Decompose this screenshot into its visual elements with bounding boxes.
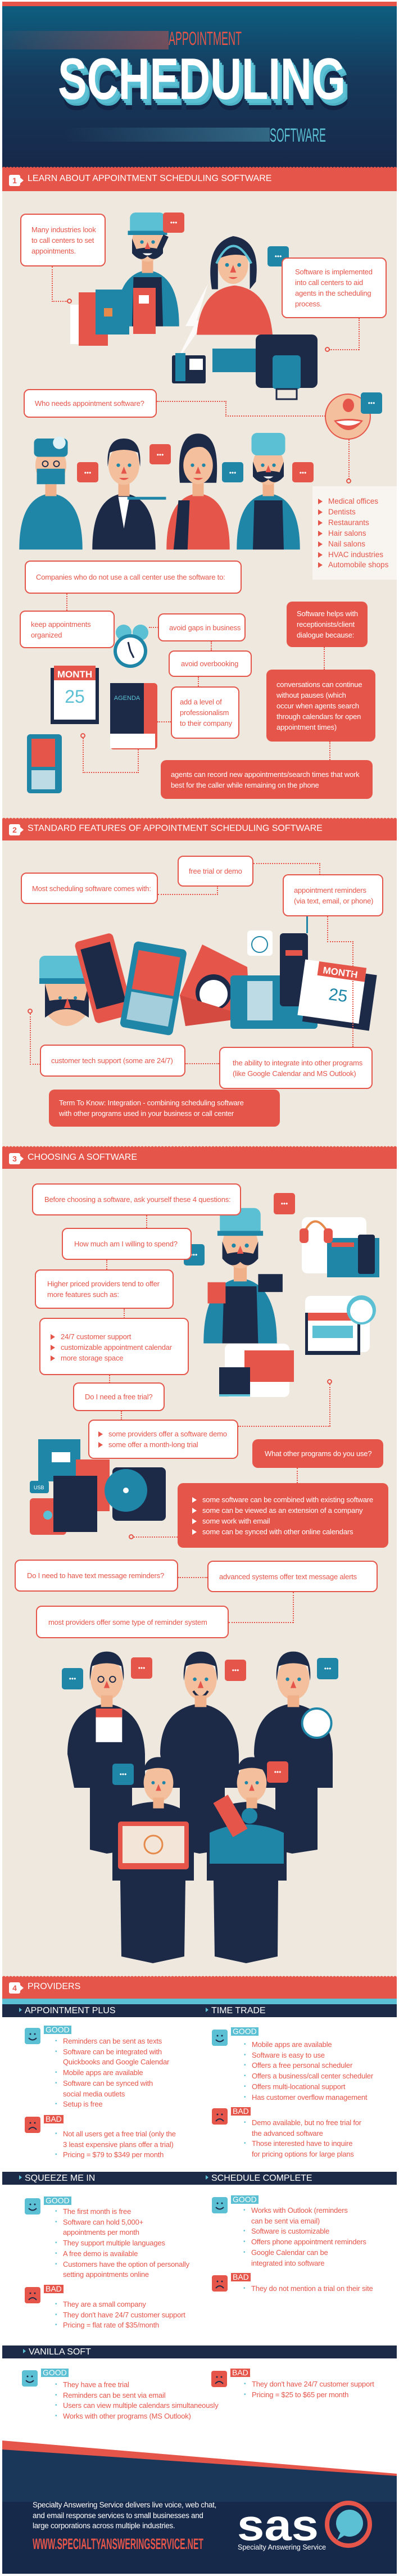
provider: vanilla soft: Users can view multiple calendars simultaneously xyxy=(63,2401,219,2410)
red box: programs list: some work with email xyxy=(202,1517,270,1525)
providers white background xyxy=(2,2017,397,2444)
box: trial list: some offer a month-long trial xyxy=(108,1440,198,1449)
man with phone xyxy=(116,213,179,326)
provider: time trade: BAD xyxy=(233,2107,249,2116)
box: most scheduling xyxy=(21,873,158,904)
box: higher priced xyxy=(35,1269,174,1309)
provider: time trade: Mobile apps are available xyxy=(252,2040,332,2049)
box: feature list: customizable appointment calendar xyxy=(61,1343,172,1352)
provider: squeeze me in: They don't have 24/7 customer support xyxy=(63,2311,185,2319)
provider: schedule complete: BAD xyxy=(233,2272,249,2281)
bubbles three men: ••• xyxy=(69,1675,76,1683)
provider bar: appointment plus / time trade xyxy=(2,2004,397,2017)
section 1 header xyxy=(2,166,397,191)
box: before choosing: Before choosing a software, ask yourself these 4 questions: xyxy=(44,1195,230,1204)
provider: time trade xyxy=(212,2027,373,2158)
provider: appointment plus: BAD xyxy=(46,2114,62,2123)
agenda book xyxy=(110,683,157,749)
provider bar: vanilla soft: VANILLA SOFT xyxy=(29,2347,91,2357)
red box: agents can record: best for the caller while remaining on the phone xyxy=(171,780,319,789)
list: industries: Restaurants xyxy=(328,518,369,527)
four professionals: ••• xyxy=(300,469,306,477)
box: free trial question: Do I need a free trial? xyxy=(85,1393,152,1401)
provider bar: squeeze me in / schedule complete xyxy=(2,2172,397,2185)
header background xyxy=(2,2,397,169)
provider: schedule complete: Works with Outlook (reminders xyxy=(251,2206,348,2215)
box: keep organized: keep appointments xyxy=(31,620,90,629)
box: avoid overbooking xyxy=(169,650,252,677)
section 3 header: 3 xyxy=(12,1154,17,1163)
provider: appointment plus: Mobile apps are available xyxy=(63,2068,143,2077)
desk phone xyxy=(172,353,206,383)
worried man with money xyxy=(203,1208,283,1344)
box: integrate xyxy=(219,1047,373,1089)
icon: calendar and clock xyxy=(305,1295,376,1355)
box: many industries xyxy=(20,214,106,266)
box: free trial: free trial or demo xyxy=(189,867,242,875)
red box: agents can record: agents can record new appointments/search times that work xyxy=(171,770,359,778)
provider bar: appointment plus / time trade: TIME TRADE xyxy=(211,2006,266,2015)
red box: helps dialogue: dialogue because: xyxy=(297,631,354,639)
provider: schedule complete: Software is customizable xyxy=(251,2227,329,2235)
section 2 header: 2 xyxy=(12,825,17,834)
provider: squeeze me in xyxy=(25,2196,190,2329)
provider: appointment plus xyxy=(25,2025,176,2159)
box: many industries: to call centers to set xyxy=(31,236,94,244)
provider: appointment plus: Reminders can be sent as texts xyxy=(63,2037,162,2045)
section 3 header xyxy=(2,1146,397,1169)
bubbles: ••• xyxy=(281,1200,288,1208)
red box: conversations xyxy=(266,670,375,742)
provider: vanilla soft: They have a free trial xyxy=(63,2380,129,2389)
four professionals: ••• xyxy=(157,451,164,459)
footer text: Specialty Answering Service delivers live voice, web chat, and email response services to small businesses and large corporations across multiple industries. xyxy=(33,2501,216,2530)
red box: programs list: some can be synced with other online calendars xyxy=(202,1527,353,1536)
provider: schedule complete xyxy=(212,2195,373,2293)
provider: appointment plus: 3 least expensive plans offer a trial) xyxy=(63,2140,174,2149)
mobile phone xyxy=(27,734,62,793)
provider: vanilla soft xyxy=(22,2368,374,2420)
bubble teal: ••• xyxy=(275,252,282,260)
bubbles three men: ••• xyxy=(324,1665,331,1673)
box: before choosing xyxy=(32,1183,241,1215)
face circle: ••• xyxy=(368,399,375,407)
red box: term to know: Term To Know: Integration - combining scheduling software xyxy=(59,1099,244,1107)
logo: SAS: Specialty Answering Service xyxy=(238,2543,326,2551)
provider: schedule complete: integrated into software xyxy=(251,2259,324,2267)
red box: conversations: without pauses (which xyxy=(276,690,346,699)
box: trial list xyxy=(88,1420,238,1459)
red box: conversations: appointment times) xyxy=(276,723,337,731)
provider: time trade: Software is easy to use xyxy=(252,2051,325,2059)
box: software implemented: process. xyxy=(295,300,322,308)
box: reminders: appointment reminders xyxy=(294,886,366,894)
software items xyxy=(30,1439,166,1535)
box: text reminders question xyxy=(15,1560,178,1592)
footer background xyxy=(2,2441,397,2574)
box: higher priced: Higher priced providers tend to offer xyxy=(47,1280,160,1288)
section 2 header xyxy=(2,817,397,840)
teal phone xyxy=(120,941,187,1036)
bubble: ••• xyxy=(170,219,177,227)
box: avoid gaps: avoid gaps in business xyxy=(169,623,241,632)
list: industries: Medical offices xyxy=(328,497,378,505)
provider: appointment plus: Quickbooks and Google Calendar xyxy=(63,2058,169,2066)
beige background xyxy=(2,191,397,1978)
lightning xyxy=(174,284,208,365)
red box: helps dialogue: receptionists/client xyxy=(297,620,355,629)
section 4 header xyxy=(2,1976,397,2004)
list: industries: Dentists xyxy=(328,508,356,516)
red box: programs list: some can be viewed as an extension of a company xyxy=(202,1506,362,1515)
provider: time trade: Offers a business/call center scheduler xyxy=(252,2072,373,2080)
section 4 header: PROVIDERS xyxy=(28,1982,80,1991)
list: industries: Nail salons xyxy=(328,540,365,548)
four professionals: ••• xyxy=(84,469,91,477)
provider: schedule complete: Offers phone appointment reminders xyxy=(251,2238,366,2246)
icon: briefcases xyxy=(219,1344,294,1397)
red box: conversations: through calendars for open xyxy=(276,712,361,721)
provider: schedule complete: GOOD xyxy=(233,2195,257,2204)
provider: time trade: for pricing options for large plans xyxy=(252,2150,354,2158)
provider: time trade: GOOD xyxy=(233,2027,257,2036)
list: industries xyxy=(312,486,397,580)
box: who needs: Who needs appointment software? xyxy=(35,399,144,408)
stopwatch icon xyxy=(247,930,273,956)
provider: vanilla soft: They don't have 24/7 customer support xyxy=(252,2380,374,2388)
bubble teal xyxy=(267,246,289,266)
section 2 header: STANDARD FEATURES OF APPOINTMENT SCHEDULING SOFTWARE xyxy=(28,824,323,833)
provider: schedule complete: can be sent via email) xyxy=(251,2217,320,2225)
red box: other programs: What other programs do you use? xyxy=(265,1449,371,1458)
box: most providers reminder: most providers offer some type of reminder system xyxy=(48,1618,207,1626)
provider: time trade: the advanced software xyxy=(252,2129,323,2137)
section 1 header: LEARN ABOUT APPOINTMENT SCHEDULING SOFTWARE xyxy=(28,174,271,183)
box: reminders: (via text, email, or phone) xyxy=(294,896,373,905)
four professionals: ••• xyxy=(229,469,236,477)
box: most providers reminder xyxy=(36,1606,229,1638)
provider bar: squeeze me in / schedule complete: SCHEDULE COMPLETE xyxy=(211,2173,312,2183)
icon: headphones and phone xyxy=(300,1217,379,1277)
box: free trial xyxy=(178,856,253,887)
section 2 illustration: devices xyxy=(39,916,377,1036)
provider: squeeze me in: The first month is free xyxy=(63,2207,131,2216)
provider bar: appointment plus / time trade: APPOINTMENT PLUS xyxy=(25,2006,116,2015)
face circle xyxy=(325,392,382,439)
box: companies xyxy=(25,561,242,594)
provider: squeeze me in: They are a small company xyxy=(63,2300,146,2308)
calendar xyxy=(297,959,378,1031)
box: text reminders question: Do I need to have text message reminders? xyxy=(27,1571,164,1580)
group of five suited men: ••• xyxy=(274,1768,281,1776)
provider: time trade: Offers a free personal scheduler xyxy=(252,2061,352,2069)
bubbles three men: ••• xyxy=(232,1666,239,1674)
box: companies: Companies who do not use a call center use the software to: xyxy=(36,573,225,581)
section 1 header: 1 xyxy=(12,176,17,185)
box: how much xyxy=(62,1228,192,1260)
box: professionalism: to their company xyxy=(180,719,232,727)
calendar month 25: 25 xyxy=(65,686,85,707)
box: feature list: 24/7 customer support xyxy=(61,1332,131,1341)
provider: vanilla soft: BAD xyxy=(232,2368,248,2377)
box: software implemented: Software is implemented xyxy=(295,268,373,276)
box: advanced systems: advanced systems offer text message alerts xyxy=(219,1572,357,1581)
red box: term to know: with other programs used in your business or call center xyxy=(59,1109,234,1118)
logo: SAS xyxy=(237,2500,372,2551)
computer xyxy=(256,335,318,399)
section 3 header: CHOOSING A SOFTWARE xyxy=(28,1153,137,1162)
provider: vanilla soft: Works with other programs (MS Outlook) xyxy=(63,2412,191,2420)
desk calendar xyxy=(212,349,257,372)
provider: appointment plus: social media outlets xyxy=(63,2090,125,2098)
box: keep organized xyxy=(20,611,115,648)
box: tech support xyxy=(40,1045,185,1077)
box: keep organized: organized xyxy=(31,631,62,639)
box: avoid overbooking: avoid overbooking xyxy=(181,659,238,668)
section 3 illustrations xyxy=(30,1193,379,1963)
list: industries: Automobile shops xyxy=(328,561,388,569)
provider: squeeze me in: setting appointments online xyxy=(63,2270,149,2279)
red box: term to know xyxy=(49,1090,280,1127)
provider: schedule complete: They do not mention a trial on their site xyxy=(251,2284,373,2293)
box: software implemented: into call centers to aid xyxy=(295,278,363,287)
front two men xyxy=(112,1802,194,1963)
woman with headset xyxy=(197,236,273,335)
box: integrate: (like Google Calendar and MS Outlook) xyxy=(233,1069,356,1077)
red box: other programs xyxy=(252,1439,383,1468)
list: industries: HVAC industries xyxy=(328,550,383,559)
provider: squeeze me in: Customers have the option of personally xyxy=(63,2260,189,2268)
provider: time trade: Demo available, but no free trial for xyxy=(252,2118,361,2127)
calendar: MONTH xyxy=(322,965,359,980)
alarm clock xyxy=(114,625,148,668)
box: avoid gaps xyxy=(158,613,246,641)
list: industries: Hair salons xyxy=(328,529,366,537)
red box: conversations: conversations can continue xyxy=(276,680,362,688)
provider bar: vanilla soft xyxy=(2,2345,397,2358)
bubbles three men xyxy=(62,1657,338,1689)
provider: squeeze me in: Software can hold 5,000+ xyxy=(63,2218,143,2226)
provider: squeeze me in: appointments per month xyxy=(63,2228,139,2236)
provider: vanilla soft: Pricing = $25 to $65 per month xyxy=(252,2390,348,2399)
provider: time trade: Those interested have to inquire xyxy=(252,2139,352,2148)
red box: agents can record xyxy=(161,760,373,799)
title xyxy=(3,28,350,146)
bubbles three men: ••• xyxy=(138,1664,145,1672)
provider: appointment plus: Software can be integrated with xyxy=(63,2048,162,2056)
provider: time trade: Offers multi-locational support xyxy=(252,2082,345,2091)
provider: vanilla soft: GOOD xyxy=(43,2368,67,2377)
provider: squeeze me in: GOOD xyxy=(46,2196,70,2205)
four professionals xyxy=(19,433,314,550)
provider: schedule complete: Google Calendar can be xyxy=(251,2248,328,2257)
bubbles xyxy=(184,1193,295,1266)
red box: programs list xyxy=(178,1483,388,1548)
box: many industries: appointments. xyxy=(31,246,76,255)
provider: vanilla soft: Reminders can be sent via email xyxy=(63,2391,165,2399)
software items: USB xyxy=(34,1485,44,1490)
provider: appointment plus: GOOD xyxy=(46,2025,70,2034)
logo: SAS: sas xyxy=(237,2500,319,2550)
red box: programs list: some software can be combined with existing software xyxy=(202,1495,373,1504)
box: software implemented xyxy=(282,257,387,318)
box: reminders xyxy=(283,874,383,916)
box: professionalism xyxy=(171,686,239,739)
box: free trial question xyxy=(73,1382,165,1411)
box: professionalism: professionalism xyxy=(180,708,229,717)
red box: helps dialogue xyxy=(287,602,368,647)
group of five suited men xyxy=(67,1652,333,1963)
envelope with stopwatch xyxy=(180,944,250,1026)
provider: time trade: Has customer overflow management xyxy=(252,2093,367,2102)
red phone xyxy=(74,932,134,1024)
provider bar: squeeze me in / schedule complete: SQUEEZE ME IN xyxy=(25,2173,95,2183)
provider: squeeze me in: BAD xyxy=(46,2284,62,2293)
bubbles: ••• xyxy=(191,1251,197,1259)
provider: appointment plus: Pricing = $79 to $349 per month xyxy=(63,2150,164,2159)
box: professionalism: add a level of xyxy=(180,698,222,706)
bubble xyxy=(163,213,184,233)
provider: appointment plus: Software can be synced with xyxy=(63,2079,153,2087)
box: feature list xyxy=(39,1318,189,1375)
worried man face xyxy=(39,956,93,1026)
provider: appointment plus: Not all users get a free trial (only the xyxy=(63,2130,176,2138)
agenda book: AGENDA xyxy=(114,695,140,702)
provider: squeeze me in: They support multiple languages xyxy=(63,2239,165,2247)
section 4 header: 4 xyxy=(12,1983,17,1992)
group of five suited men: ••• xyxy=(120,1770,126,1778)
red box: helps dialogue: Software helps with xyxy=(297,609,358,618)
box: feature list: more storage space xyxy=(61,1354,123,1362)
box: who needs xyxy=(24,389,157,418)
desk phone xyxy=(230,911,318,1029)
title: APPOINTMENT xyxy=(169,28,242,49)
box: integrate: the ability to integrate into other programs xyxy=(233,1058,362,1067)
provider: squeeze me in: Pricing = flat rate of $35/month xyxy=(63,2321,159,2329)
provider: squeeze me in: A free demo is available xyxy=(63,2249,138,2258)
box: advanced systems xyxy=(207,1561,378,1592)
box: software implemented: agents in the scheduling xyxy=(295,289,371,297)
title: SOFTWARE xyxy=(270,125,326,146)
red box: conversations: occur when agents search xyxy=(276,702,359,709)
box: how much: How much am I willing to spend? xyxy=(74,1240,178,1248)
box: most scheduling: Most scheduling software comes with: xyxy=(32,884,151,893)
calendar month 25 xyxy=(51,666,99,724)
calendar: 25 xyxy=(328,985,348,1006)
box: higher priced: more features such as: xyxy=(47,1290,119,1299)
box: tech support: customer tech support (some are 24/7) xyxy=(51,1056,173,1065)
section 1 illustrations xyxy=(19,213,382,793)
box: many industries: Many industries look xyxy=(31,225,96,234)
provider: appointment plus: Setup is free xyxy=(63,2100,102,2108)
books xyxy=(70,288,156,346)
box: trial list: some providers offer a software demo xyxy=(108,1430,227,1438)
calendar month 25: MONTH xyxy=(57,669,92,680)
